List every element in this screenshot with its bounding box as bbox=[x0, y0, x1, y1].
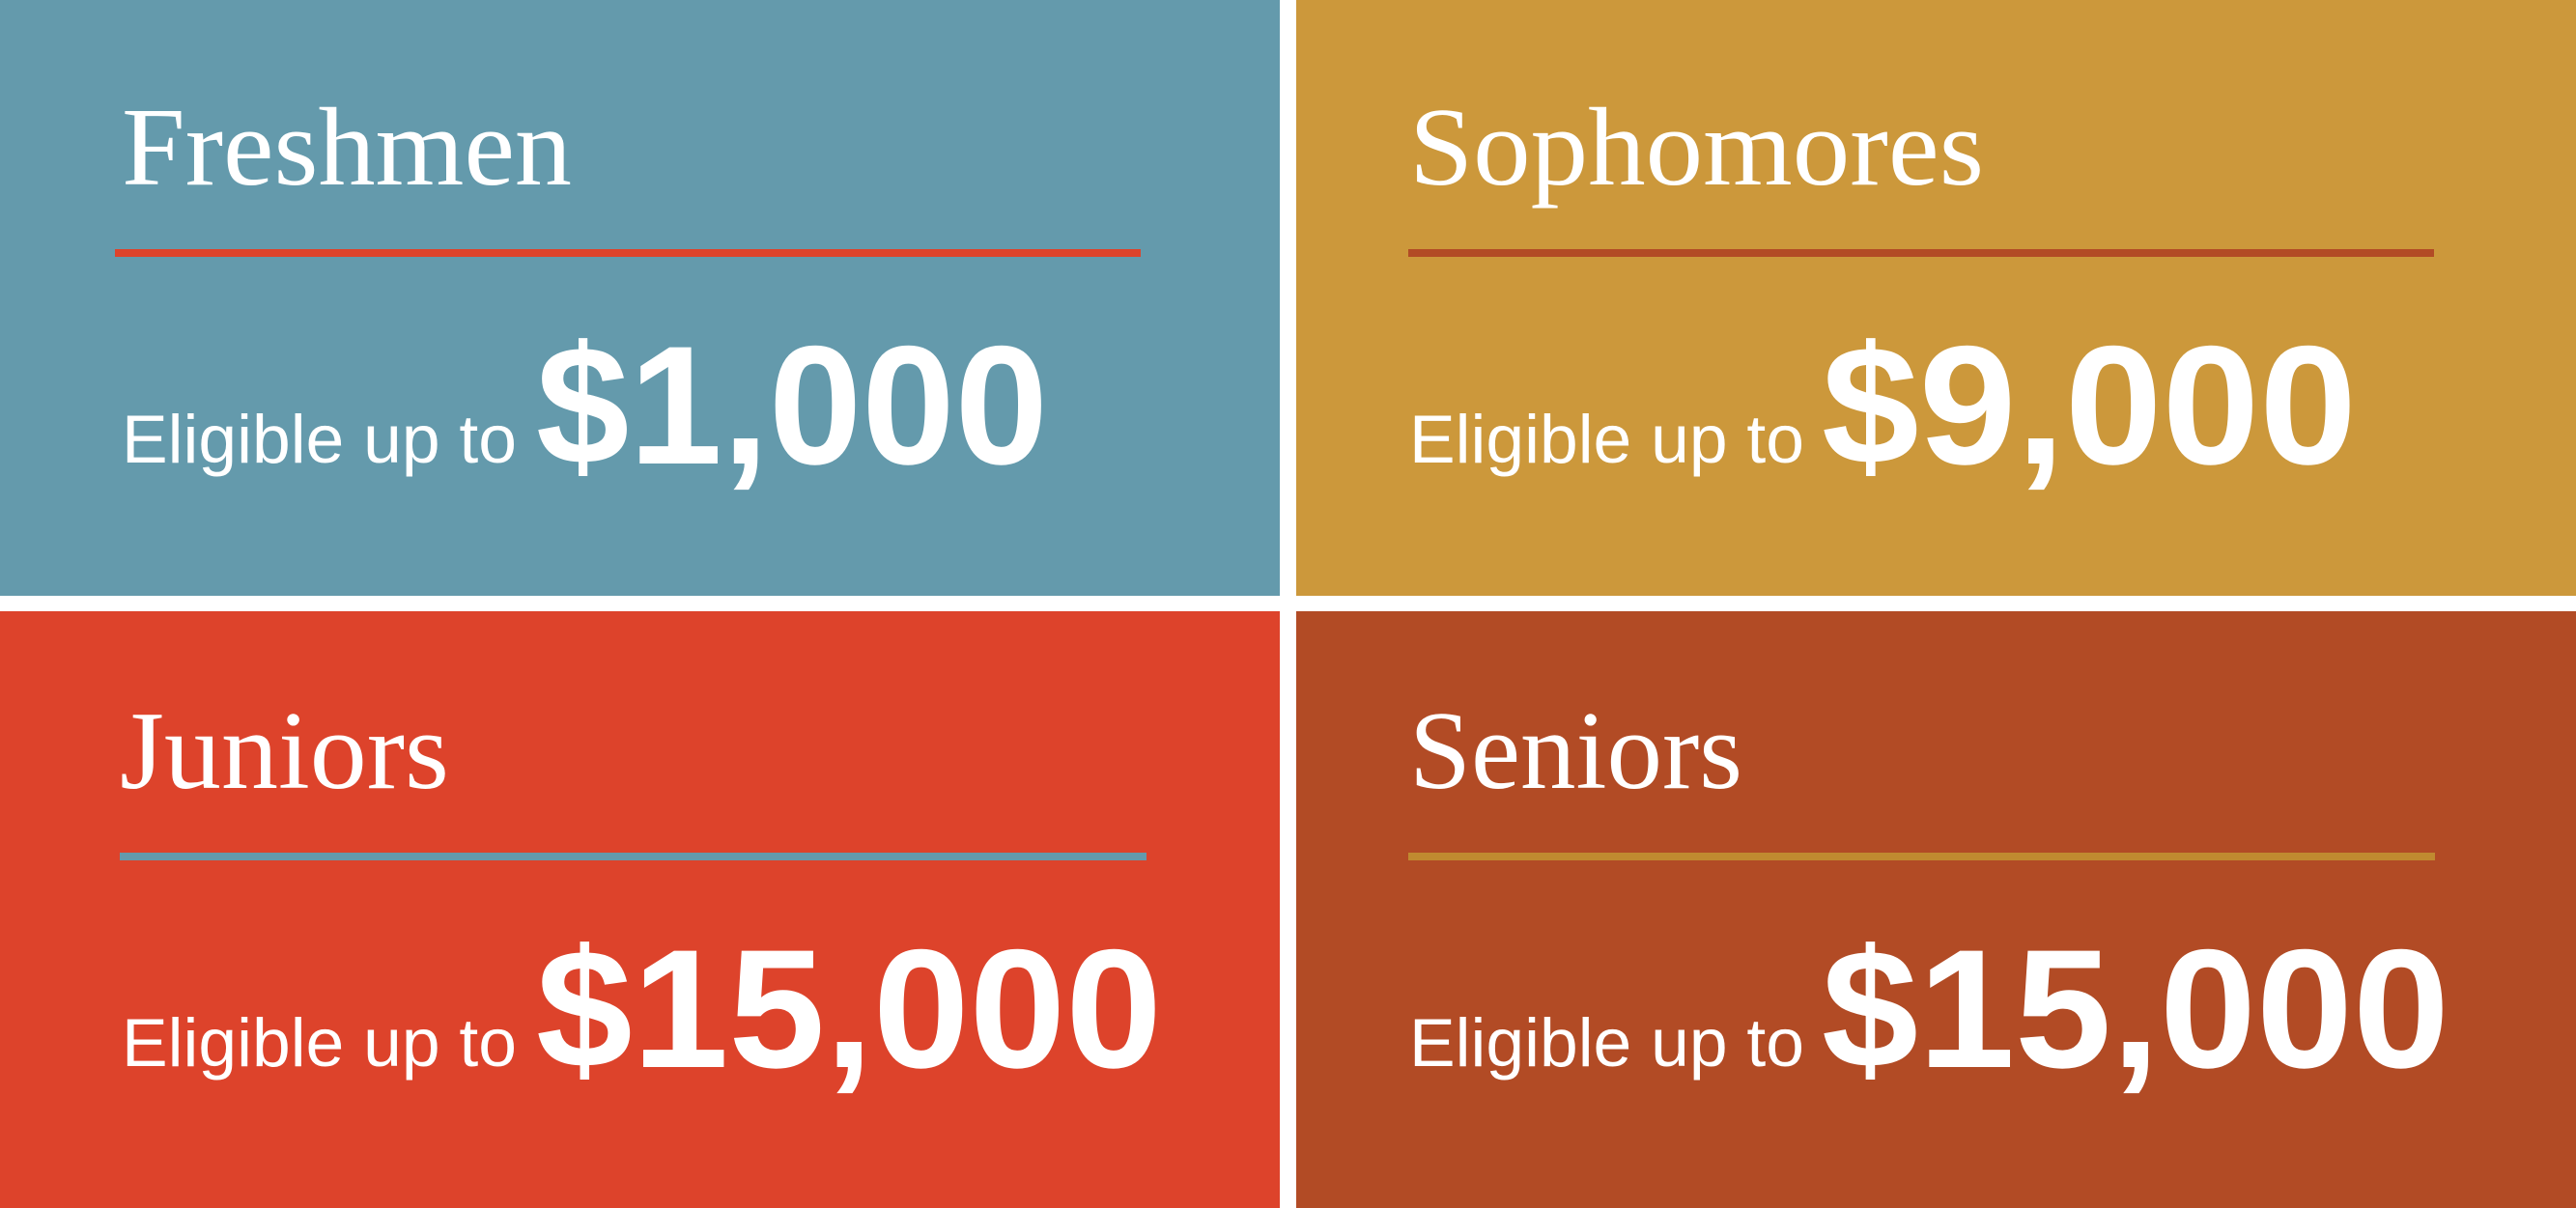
label: eligible up to: Eligible up to bbox=[1409, 401, 1804, 477]
amount: $9,000: $9,000 bbox=[1822, 312, 2357, 500]
heading: Sophomores: Sophomores bbox=[1409, 86, 1984, 210]
panel: sophomores bbox=[1296, 0, 2576, 596]
panel: freshmen bbox=[0, 0, 1280, 596]
label: eligible up to: Eligible up to bbox=[122, 401, 517, 477]
rule: red bbox=[115, 249, 1141, 257]
heading: Seniors: Seniors bbox=[1409, 689, 1742, 813]
rule: gold bbox=[1408, 853, 2435, 860]
panel background: blue bbox=[0, 0, 1280, 596]
label: eligible up to: Eligible up to bbox=[122, 1004, 517, 1081]
panel background: red bbox=[0, 611, 1280, 1208]
heading: Freshmen: Freshmen bbox=[122, 86, 572, 210]
amount: $15,000: $15,000 bbox=[536, 915, 1162, 1104]
panel background: brown bbox=[1296, 611, 2576, 1208]
label: eligible up to: Eligible up to bbox=[1409, 1004, 1804, 1081]
amount: $15,000: $15,000 bbox=[1822, 915, 2449, 1104]
panel: seniors bbox=[1296, 611, 2576, 1208]
amount: $1,000: $1,000 bbox=[536, 312, 1048, 500]
panel background: gold bbox=[1296, 0, 2576, 596]
panel: juniors bbox=[0, 611, 1280, 1208]
heading: Juniors: Juniors bbox=[120, 689, 449, 813]
rule: blue bbox=[120, 853, 1146, 860]
rule: brown bbox=[1408, 249, 2434, 257]
